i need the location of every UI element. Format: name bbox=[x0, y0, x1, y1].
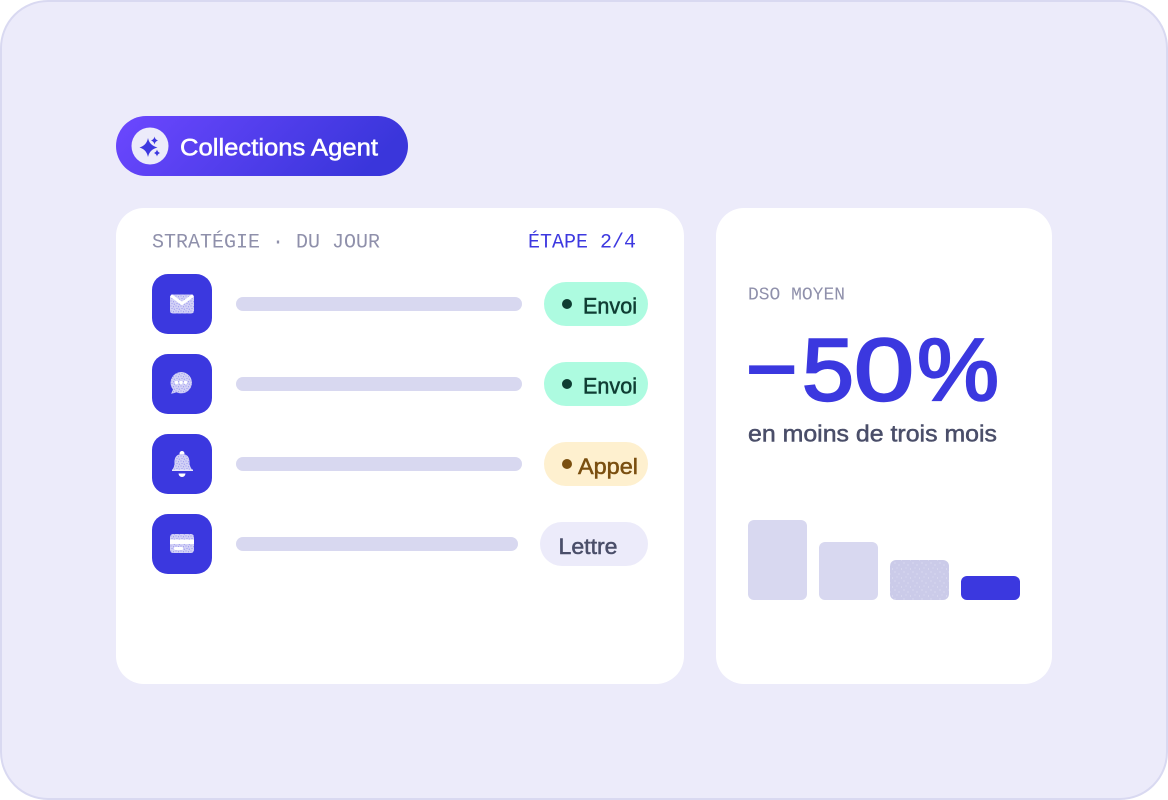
icon: sparkles bbox=[132, 128, 168, 164]
badge: Collections Agent bbox=[116, 116, 408, 176]
status: Appel bbox=[544, 442, 648, 486]
panel: DSO bbox=[716, 208, 1052, 684]
metric: -50%: 0 bbox=[854, 320, 914, 419]
label: DSO moyen: DSO MOYEN bbox=[748, 286, 845, 306]
heading: strategy: STRATÉGIE · DU JOUR bbox=[152, 230, 380, 254]
bar chart bbox=[748, 520, 1020, 600]
status: Appel: Appel bbox=[578, 454, 638, 479]
status: Envoi: Envoi bbox=[583, 374, 637, 398]
caption: en moins de trois mois bbox=[748, 420, 997, 446]
icon: bell bbox=[152, 434, 212, 494]
icon: chat bubble bbox=[152, 354, 212, 414]
status: Envoi bbox=[544, 362, 648, 406]
status: Lettre: Lettre bbox=[558, 534, 618, 559]
row: letter bbox=[152, 514, 648, 574]
row: message bbox=[152, 354, 648, 414]
step indicator: ÉTAPE 2/4 bbox=[528, 230, 636, 254]
panel: strategy bbox=[116, 208, 684, 684]
row: call bbox=[152, 434, 648, 494]
icon: envelope bbox=[152, 274, 212, 334]
metric: -50%: % bbox=[917, 320, 999, 419]
icon: credit card bbox=[152, 514, 212, 574]
row: email bbox=[152, 274, 648, 334]
badge label: Collections Agent bbox=[180, 134, 378, 162]
metric: -50%: 5 bbox=[802, 320, 854, 419]
status: Envoi: Envoi bbox=[583, 294, 637, 318]
metric: -50%: − bbox=[746, 319, 797, 418]
status: Envoi bbox=[544, 282, 648, 326]
status: Lettre bbox=[540, 522, 648, 566]
